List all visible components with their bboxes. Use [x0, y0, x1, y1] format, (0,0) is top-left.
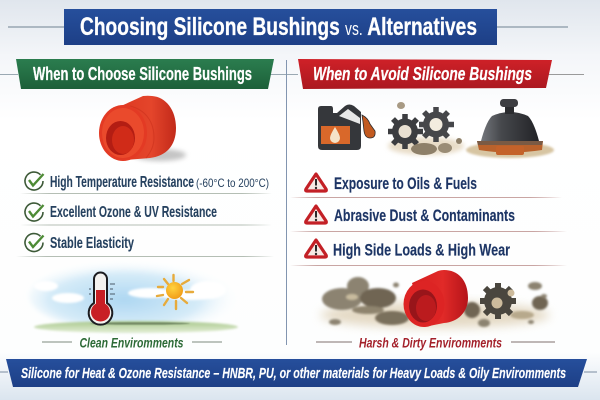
item: high side loads and high wear	[306, 240, 510, 260]
item: exposure to oils and fuels	[306, 174, 477, 193]
item: stable elasticity: Stable Elasticity	[50, 235, 134, 252]
item: abrasive dust and contaminants: Abrasive Dust & Contaminants	[334, 206, 515, 225]
panel: when to avoid silicone bushings	[290, 59, 567, 350]
list: conditions to avoid	[290, 174, 567, 266]
illustration: clean environment scene	[29, 260, 241, 350]
item: high temperature resistance: High Temperature Resistance	[50, 174, 194, 191]
heading: when to choose	[16, 59, 274, 89]
label: harsh and dirty environments: Harsh & Dirty Enviromments	[359, 336, 502, 350]
heading: when to choose: When to Choose Silicone Bushings	[33, 64, 252, 84]
item: excellent ozone and uv resistance	[25, 203, 217, 221]
item: high side loads and high wear: High Side Loads & High Wear	[333, 240, 510, 260]
heading: when to avoid: When to Avoid Silicone Bushings	[313, 64, 532, 84]
icon: red silicone bushing	[99, 96, 186, 161]
gear left	[388, 114, 423, 149]
title banner: Choosing Silicone Bushings vs. Alternatives	[80, 13, 477, 41]
item: exposure to oils and fuels: Exposure to Oils & Fuels	[334, 174, 477, 193]
icon: worn dome bushing on dirt	[466, 99, 554, 158]
heading: when to avoid	[298, 59, 552, 89]
item: high temperature resistance: (-60°C to 200°C)	[196, 176, 269, 190]
icon: thermometer	[89, 273, 115, 325]
item: stable elasticity	[25, 234, 134, 252]
item: abrasive dust and contaminants	[306, 206, 515, 225]
icon: sun	[157, 275, 193, 309]
gear	[480, 283, 516, 319]
panel: when to choose silicone bushings	[16, 59, 274, 350]
illustration: harsh and dirty scene	[316, 270, 555, 350]
icon: oil canister	[318, 104, 375, 150]
icon: dusty gears	[388, 102, 464, 155]
item: excellent ozone and uv resistance: Excellent Ozone & UV Resistance	[50, 204, 217, 221]
footer banner	[0, 359, 597, 387]
label: clean environments: Clean Enviromments	[80, 336, 184, 350]
list: silicone benefits	[16, 172, 274, 257]
gear right	[419, 107, 454, 142]
icon: red bushing in dirt	[404, 270, 468, 327]
